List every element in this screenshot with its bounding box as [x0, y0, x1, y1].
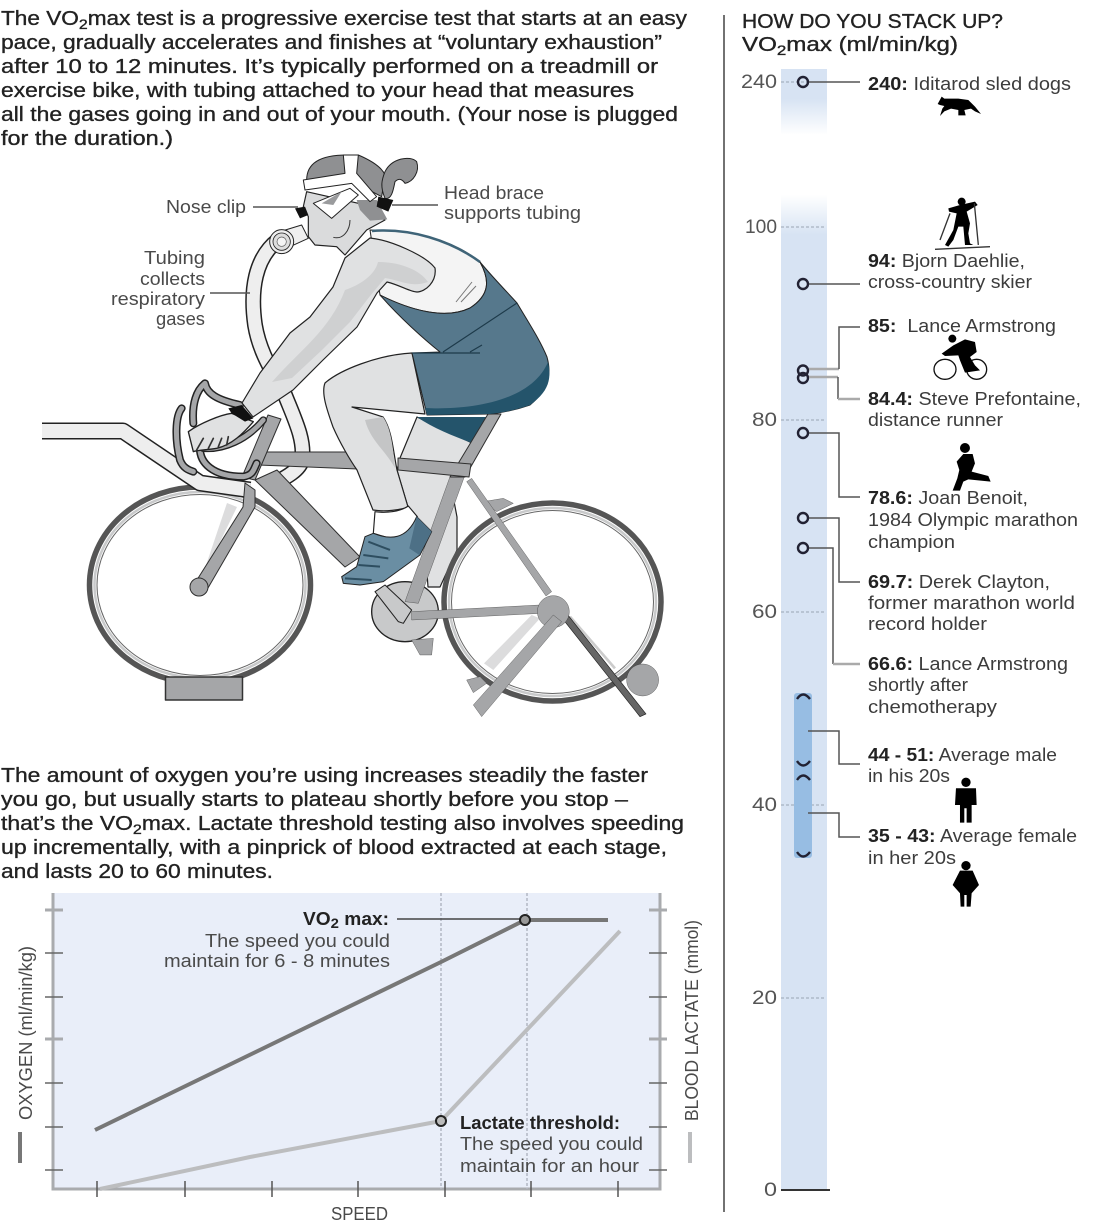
second paragraph: 2: [133, 821, 142, 837]
icon: runner: [953, 443, 991, 491]
right axis label: BLOOD LACTATE (mmol): [682, 920, 702, 1121]
entry: Joan Benoit: champion: [868, 532, 955, 552]
x axis label: SPEED: [331, 1204, 388, 1224]
VO2max scale bar: 0: [764, 1180, 777, 1201]
right column heading: max (ml/min/kg): [786, 34, 958, 56]
entry: Lance Armstrong after chemotherapy: chemotherapy: [868, 697, 997, 717]
label: tubing: collects: [140, 269, 205, 289]
right column heading: VO: [742, 34, 771, 56]
front stand: [166, 677, 242, 700]
intro paragraph: exercise bike, with tubing attached to your head that measures: [1, 80, 634, 102]
icon: skier: [935, 198, 990, 249]
second paragraph: max. Lactate threshold testing also involves speeding: [142, 813, 684, 835]
far leg: [397, 417, 472, 587]
label: tubing: respiratory: [111, 289, 205, 309]
left axis label: OXYGEN (ml/min/kg): [16, 946, 36, 1120]
label: head brace: [392, 183, 581, 223]
entry: Steve Prefontaine: 84.4: Steve Prefontaine,: [868, 389, 1081, 409]
entry: Steve Prefontaine: distance runner: [868, 410, 1003, 430]
VO2max scale bar: 100: [745, 217, 777, 238]
handlebars and hand: [176, 383, 263, 477]
second paragraph: The amount of oxygen you’re using increases steadily the faster: [1, 765, 648, 787]
label: tubing: [111, 248, 250, 329]
icon: man: [955, 778, 977, 823]
entry: average male: in his 20s: [868, 766, 950, 786]
intro paragraph: after 10 to 12 minutes. It’s typically performed on a treadmill or: [1, 56, 658, 78]
average range bars: [794, 693, 812, 858]
brace clamp: [377, 197, 393, 212]
trainer stand and rollers: [372, 475, 659, 717]
goggles: [313, 188, 358, 218]
VO2 max marker and callout: 2: [331, 915, 339, 931]
intro paragraph: 2: [79, 16, 88, 32]
VO2 max marker and callout: [164, 909, 530, 971]
entry: Lance Armstrong after chemotherapy: [868, 654, 1068, 717]
entry: average male: 44 - 51: Average male: [868, 745, 1057, 765]
icon: cyclist: [934, 335, 987, 379]
breathing tube to machine: [42, 240, 303, 490]
lactate threshold marker and callout: Lactate threshold:: [460, 1113, 620, 1133]
head: [270, 155, 418, 255]
column divider: [723, 15, 725, 1212]
entry: Joan Benoit: 78.6: Joan Benoit,: [868, 488, 1028, 508]
entry: Derek Clayton: 69.7: Derek Clayton,: [868, 572, 1050, 592]
entry: Lance Armstrong: 85: Lance Armstrong: [868, 316, 1056, 336]
entry: Lance Armstrong after chemotherapy: 66.6: Lance Armstrong: [868, 654, 1068, 674]
VO2max scale bar: 20: [752, 988, 777, 1009]
entry: Steve Prefontaine: [868, 389, 1081, 430]
lactate threshold marker and callout: maintain for an hour: [460, 1156, 639, 1176]
icon: woman: [953, 861, 979, 907]
VO2 max marker and callout: VO: [303, 909, 329, 929]
nose clip: [295, 207, 308, 218]
label: head brace: Head brace: [444, 183, 544, 203]
intro paragraph: pace, gradually accelerates and finishes at “voluntary exhaustion”: [1, 32, 662, 54]
icon: dog: [938, 97, 981, 116]
label: nose clip: Nose clip: [166, 197, 246, 217]
VO2 max marker and callout: maintain for 6 - 8 minutes: [164, 951, 390, 971]
illustration: cyclist on stationary bike with tubing: [42, 155, 661, 717]
intro paragraph: all the gases going in and out of your mouth. (Your nose is plugged: [1, 104, 678, 126]
VO2max scale bar: 240: [741, 72, 777, 93]
chart panel: [53, 893, 660, 1189]
near leg: [324, 353, 425, 511]
label: nose clip: [166, 197, 298, 217]
right column heading: [742, 11, 1003, 58]
lactate threshold marker and callout: [436, 1113, 643, 1176]
label: head brace: supports tubing: [444, 203, 581, 223]
bike frame: [190, 414, 501, 596]
lactate line: [100, 931, 620, 1189]
entry: Bjorn Daehlie: [868, 198, 1032, 292]
bare back under jersey: [370, 230, 487, 313]
entry: average female: 35 - 43: Average female: [868, 826, 1077, 846]
intro paragraph: The VO: [1, 8, 70, 30]
rear wheel: [444, 503, 661, 701]
entry: average male: [868, 745, 1057, 823]
second paragraph: that’s the VO: [1, 813, 116, 835]
entry: sled dogs: [868, 74, 1071, 116]
lactate threshold marker and callout: The speed you could: [460, 1134, 643, 1154]
entry: Lance Armstrong after chemotherapy: shortly after: [868, 675, 968, 695]
oxygen line: [95, 920, 608, 1130]
label: tubing: gases: [156, 309, 205, 329]
VO2 max marker and callout: max:: [339, 909, 389, 929]
right column heading: 2: [777, 42, 787, 58]
entry: Derek Clayton: former marathon world: [868, 593, 1075, 613]
entry: Bjorn Daehlie: 94: Bjorn Daehlie,: [868, 251, 1025, 271]
entry: Bjorn Daehlie: cross-country skier: [868, 272, 1032, 292]
front wheel: [90, 487, 310, 683]
VO2max scale bar: 60: [752, 602, 777, 623]
arm and shoulder: [242, 238, 435, 417]
second paragraph: [1, 765, 684, 883]
intro paragraph: [1, 8, 687, 150]
sock and shoe: [342, 506, 432, 585]
marker leaders: [798, 77, 860, 837]
line chart: oxygen and blood lactate vs speed: [16, 893, 702, 1224]
intro paragraph: max test is a progressive exercise test that starts at an easy: [88, 8, 687, 30]
head brace: [303, 155, 377, 202]
entry: Derek Clayton: [868, 572, 1075, 634]
entry: Lance Armstrong: [868, 316, 1056, 379]
right column heading: HOW DO YOU STACK UP?: [742, 11, 1003, 33]
VO2max scale bar: 80: [752, 410, 777, 431]
mouthpiece: [280, 225, 308, 247]
VO2 max marker and callout: The speed you could: [205, 931, 390, 951]
entry: sled dogs: 240: Iditarod sled dogs: [868, 74, 1071, 94]
entry: average female: [868, 826, 1077, 907]
second paragraph: up incrementally, with a pinprick of blood extracted at each stage,: [1, 837, 667, 859]
second paragraph: and lasts 20 to 60 minutes.: [1, 861, 273, 883]
second paragraph: you go, but usually starts to plateau shortly before you stop –: [1, 789, 629, 811]
entry: Derek Clayton: record holder: [868, 614, 987, 634]
entry: average female: in her 20s: [868, 848, 956, 868]
jersey and shorts: [380, 262, 549, 415]
intro paragraph: for the duration.): [1, 128, 173, 150]
label: tubing: Tubing: [144, 248, 205, 268]
VO2max scale bar: 40: [752, 795, 777, 816]
VO2max scale bar: [741, 69, 830, 1201]
entry: Joan Benoit: 1984 Olympic marathon: [868, 510, 1078, 530]
entry: Joan Benoit: [868, 443, 1078, 552]
